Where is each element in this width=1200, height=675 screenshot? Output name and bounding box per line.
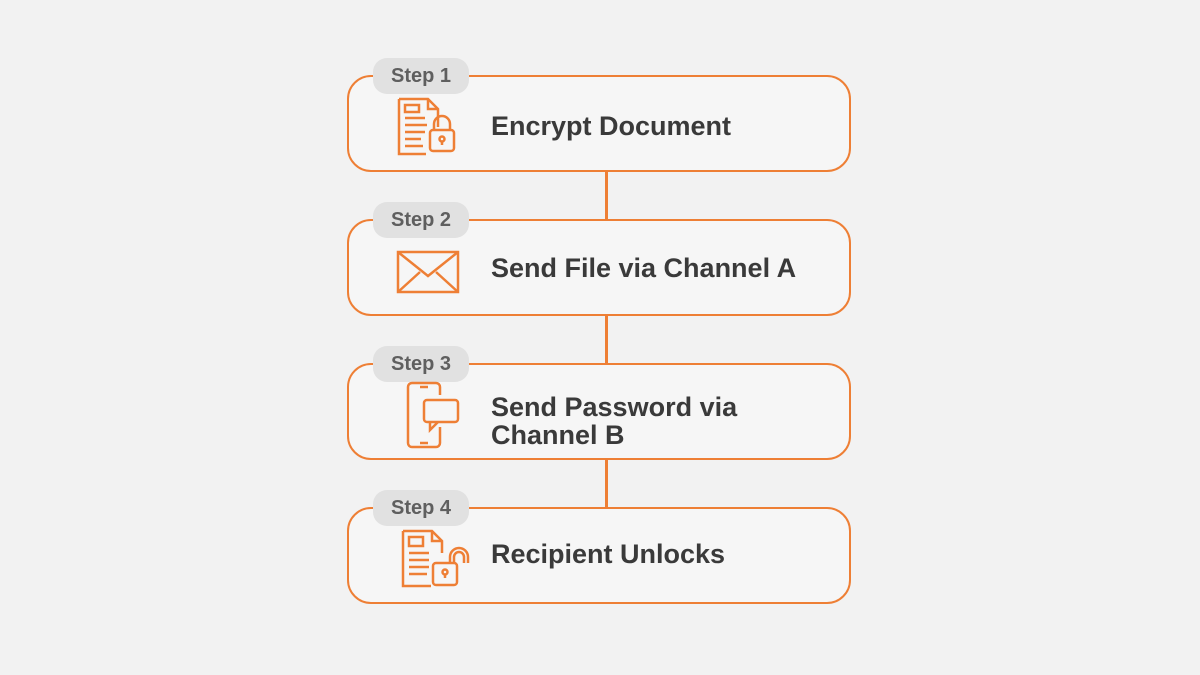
panel: step 3 xyxy=(347,363,851,460)
icon: document with open lock xyxy=(402,530,470,588)
step 2 title: Send File via Channel A xyxy=(491,253,796,283)
step 4 title: Recipient Unlocks xyxy=(491,539,725,569)
icon: document with lock xyxy=(398,98,456,156)
step 3 label: Step 3 xyxy=(391,353,451,375)
panel: step 1 xyxy=(347,75,851,172)
step 4 label: Step 4 xyxy=(391,497,451,519)
step 2 label: Step 2 xyxy=(391,209,451,231)
step 1 label: Step 1 xyxy=(391,65,451,87)
panel: step 2 xyxy=(347,219,851,316)
connector 2-3 xyxy=(605,316,608,364)
connector 3-4 xyxy=(605,460,608,508)
step 3 title: Send Password via xyxy=(491,392,737,422)
step 3 title xyxy=(491,392,738,450)
panel: step 4 xyxy=(347,507,851,604)
step 4 label xyxy=(373,490,469,526)
step 2 label xyxy=(373,202,469,238)
connector 1-2 xyxy=(605,172,608,220)
step 3 title: Channel B xyxy=(491,420,625,450)
step 1 label xyxy=(373,58,469,94)
icon: envelope xyxy=(396,250,460,294)
icon: phone with chat bubble xyxy=(406,382,460,448)
step 1 title: Encrypt Document xyxy=(491,111,731,141)
step 3 label xyxy=(373,346,469,382)
